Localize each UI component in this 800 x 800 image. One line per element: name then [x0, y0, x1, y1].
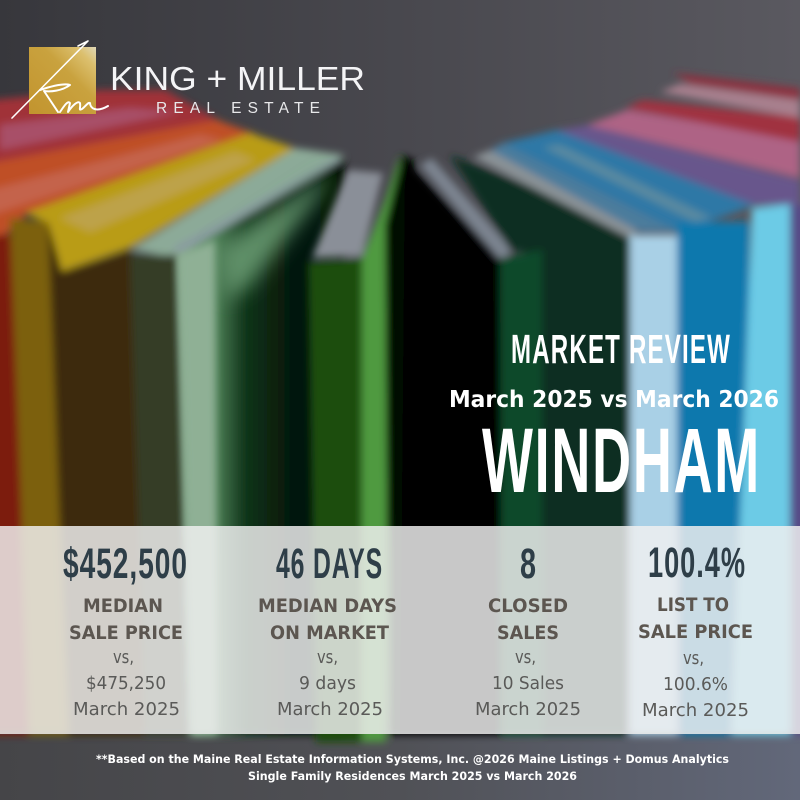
stat: closed sales: CLOSED — [488, 595, 568, 617]
stat: median sale price — [63, 540, 188, 720]
stat: closed sales — [475, 540, 581, 720]
stat: median days on market: vs, — [317, 647, 338, 668]
subheading: date comparison: March 2025 vs March 2026 — [449, 387, 779, 413]
soft sheen on sage book cover — [215, 170, 335, 300]
stat: median days on market: March 2025 — [277, 699, 383, 720]
logo subtitle: REAL ESTATE — [156, 100, 320, 117]
stat: median days on market: 9 days — [299, 673, 356, 694]
title block — [449, 326, 779, 512]
panel background — [0, 526, 800, 734]
logo script monogram — [12, 41, 108, 118]
stat: median sale price: vs, — [113, 647, 134, 668]
stat: median sale price: MEDIAN — [83, 595, 163, 617]
stat: median sale price: March 2025 — [73, 699, 180, 720]
stat: closed sales: SALES — [497, 622, 559, 644]
logo gold square — [29, 47, 96, 114]
stat: median sale price: $452,500 — [63, 540, 188, 588]
logo name: KING + MILLER — [110, 60, 365, 97]
footnote: data source: **Based on the Maine Real Estate Information Systems, Inc. @2026 Maine Listings + Domus Analytics — [96, 752, 729, 766]
stat: median days on market: 46 DAYS — [276, 540, 383, 588]
stat: closed sales: March 2025 — [475, 699, 581, 720]
stat: median days on market — [258, 540, 397, 720]
logo: King + Miller Real Estate — [12, 41, 365, 118]
footnote: data source — [96, 752, 729, 783]
stat: list to sale price: SALE PRICE — [638, 621, 753, 643]
stat: closed sales: 10 Sales — [492, 673, 564, 694]
stat: list to sale price: 100.4% — [648, 539, 746, 587]
stat: closed sales: 8 — [520, 540, 536, 588]
stat: median sale price: SALE PRICE — [69, 622, 183, 644]
stat: median days on market: MEDIAN DAYS — [258, 595, 397, 617]
footnote: data source: Single Family Residences March 2025 vs March 2026 — [248, 769, 577, 783]
stat: list to sale price — [638, 539, 753, 721]
stat: closed sales: vs, — [515, 647, 536, 668]
stat: list to sale price: LIST TO — [657, 594, 729, 616]
stat: list to sale price: vs, — [683, 648, 704, 669]
stat: list to sale price: March 2025 — [642, 700, 749, 721]
panel: statistics — [0, 526, 800, 734]
stat: list to sale price: 100.6% — [663, 674, 728, 695]
stat: median sale price: $475,250 — [86, 673, 166, 694]
stat: median days on market: ON MARKET — [270, 622, 389, 644]
